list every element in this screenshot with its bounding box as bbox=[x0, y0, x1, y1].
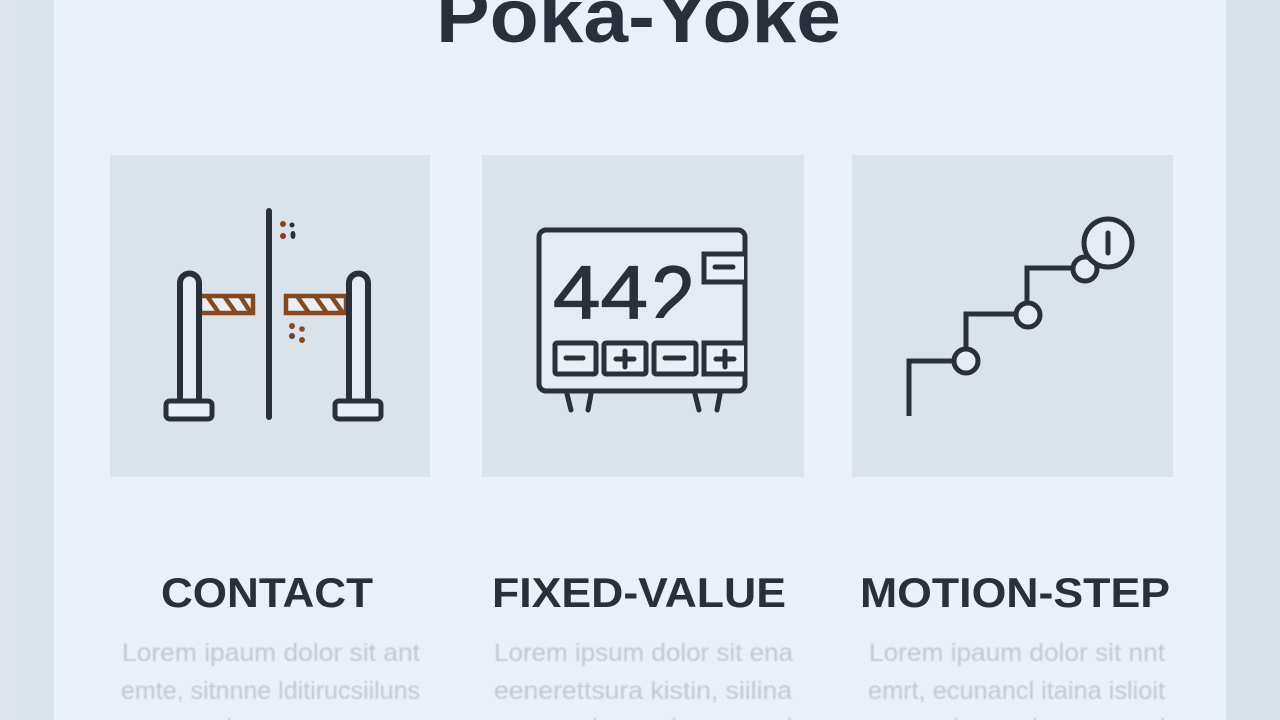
text block: motion-step description bbox=[868, 639, 1165, 720]
icon: centre divider bbox=[266, 211, 272, 417]
icon: counter number: 2 bbox=[651, 249, 695, 343]
panel: contact icon bbox=[110, 155, 430, 477]
text block: motion-step description: Lorem ipaum dolor sit nnt bbox=[869, 639, 1165, 667]
heading: contact: CONTACT bbox=[161, 569, 373, 616]
heading: motion-step: MOTION-STEP bbox=[860, 569, 1170, 616]
icon: left post bbox=[166, 274, 212, 419]
text block: fixed-value description bbox=[494, 639, 793, 720]
icon: counter number bbox=[554, 265, 691, 319]
icon: left barrier arm bbox=[200, 296, 253, 313]
icon: counter top indicator bbox=[704, 254, 744, 282]
text block: contact description: emte, sitnnne lditirucsiiluns bbox=[121, 677, 420, 705]
text block: contact description bbox=[121, 639, 420, 720]
icon: step nodes bbox=[954, 257, 1097, 373]
heading: fixed-value: FIXED-VALUE bbox=[492, 569, 786, 616]
icon: right post bbox=[335, 274, 381, 419]
icon: right barrier arm bbox=[286, 296, 346, 313]
icon: staircase line bbox=[909, 268, 1073, 416]
text block: contact description: Lorem ipaum dolor sit ant bbox=[122, 639, 420, 667]
panel: fixed-value icon bbox=[482, 155, 804, 477]
icon: counter buttons bbox=[555, 343, 744, 374]
icon: counter number: 44 bbox=[553, 250, 648, 334]
text block: fixed-value description: Lorem ipsum dolor sit ena bbox=[494, 639, 793, 667]
icon: lower debris dots bbox=[289, 323, 305, 343]
panel: motion-step icon bbox=[852, 155, 1173, 477]
text block: fixed-value description: eenerettsura kistin, siilina bbox=[494, 677, 792, 705]
icon: upper debris dots bbox=[280, 221, 296, 239]
icon: counter body bbox=[539, 230, 745, 391]
icon: counter feet bbox=[567, 394, 720, 410]
icon: final step indicator bbox=[1084, 219, 1132, 267]
text block: motion-step description: emrt, ecunancl itaina islioit bbox=[868, 677, 1165, 705]
